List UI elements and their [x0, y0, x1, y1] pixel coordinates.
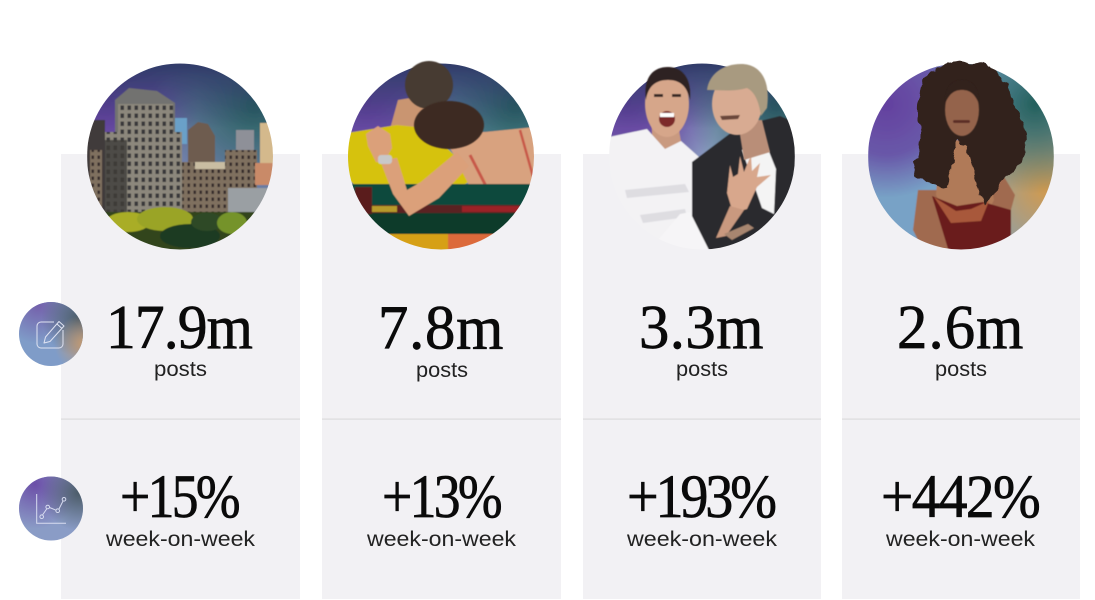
- panel background: [61, 154, 300, 599]
- icon: pencil in square: [19, 302, 83, 366]
- photo: smiling couple: [609, 63, 795, 255]
- metric: posts: 2.6m: [897, 293, 1023, 362]
- icon: line chart: [19, 476, 83, 540]
- metric label: posts: [935, 358, 987, 381]
- panel background: [583, 154, 821, 599]
- woman's hair: [414, 101, 484, 149]
- photo: city skyline: [87, 63, 274, 252]
- panel: column 2: [322, 61, 561, 599]
- metric: growth: +442%: [881, 462, 1041, 530]
- panel: column 3: [583, 63, 821, 599]
- metric label: posts: [416, 359, 468, 382]
- metric: posts: 3.3m: [639, 293, 763, 362]
- metric label: posts: [154, 358, 207, 381]
- photo: couple on a bench: [347, 61, 541, 252]
- metric label: posts: [676, 358, 728, 381]
- metric: growth: +13%: [382, 464, 503, 531]
- man's head: [707, 64, 770, 160]
- panel: column 4: [842, 60, 1080, 599]
- growth label: week-on-week: [626, 528, 778, 551]
- metric: posts: 7.8m: [378, 294, 503, 363]
- curly hair and face: [913, 60, 1026, 203]
- metric: growth: +193%: [627, 463, 777, 531]
- metric: growth: +15%: [120, 464, 241, 531]
- photo: woman with curly hair: [868, 60, 1054, 252]
- woman's head: [645, 67, 690, 137]
- growth label: week-on-week: [366, 528, 517, 551]
- man's head: [405, 61, 453, 109]
- panel background: [322, 154, 561, 599]
- metric: posts: 17.9m: [106, 294, 253, 362]
- panel: column 1: [61, 63, 300, 599]
- panel background: [842, 154, 1080, 599]
- growth label: week-on-week: [105, 528, 256, 551]
- growth label: week-on-week: [885, 528, 1036, 551]
